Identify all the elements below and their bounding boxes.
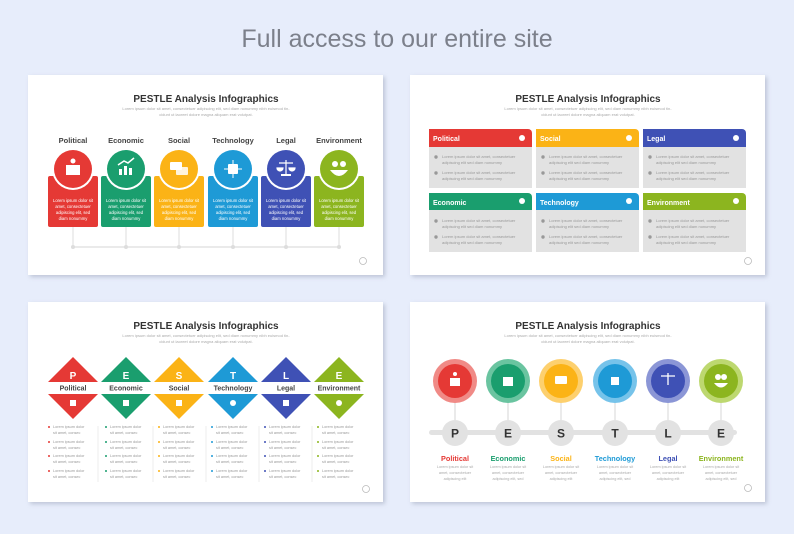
panel: slide 4 timeline: cidunt ut laoreet dolore magna aliquam erat volutpat. [541,339,635,344]
panel: slide 4 timeline: L [664,426,672,440]
icons slide 1 [66,158,348,178]
panel: slide 3 diamonds: Lorem ipsum dolor [322,469,354,473]
panel: slide 1 circles with boxes: adipiscing elit, sed [216,210,251,215]
panel: slide 4 timeline: adipiscing elit, sed [705,477,737,481]
panel: slide 2 grid cards: adipiscing elit sed diam nonummy [656,224,716,229]
panel: slide 3 diamonds: sit amet, consec [53,431,81,435]
panel: slide 2 grid cards: adipiscing elit sed diam nonummy [656,176,716,181]
panel: slide 4 timeline: Political [441,454,469,463]
panel: slide 4 timeline: PESTLE Analysis Infographics [515,321,661,332]
panel: slide 4 timeline: amet, consectetuer [545,471,578,475]
panel: slide 3 diamonds: T [230,371,236,382]
panel: slide 2 grid cards: Lorem ipsum dolor sit amet, consectetuer [656,154,730,159]
panel: slide 2 grid cards: Lorem ipsum dolor sit amet, consectetuer [442,218,516,223]
panel: slide 4 timeline: Environment [699,454,744,463]
panel: slide 3 diamonds: Social [169,386,189,392]
panel: slide 3 diamonds: E [336,371,343,382]
panel: slide 2 grid cards: Lorem ipsum dolor sit amet, consectetuer [656,234,730,239]
panel: slide 3 diamonds: Political [60,386,86,392]
panel: slide 3 diamonds: sit amet, consec [110,460,138,464]
panel: slide 2 grid cards: adipiscing elit sed diam nonummy [549,240,609,245]
panel: slide 3 diamonds: Lorem ipsum dolor [269,454,301,458]
panel: slide 3 diamonds: sit amet, consec [163,431,191,435]
panel: slide 4 timeline: Lorem ipsum dolor sit [543,465,580,469]
panel: slide 3 diamonds: sit amet, consec [269,475,297,479]
panel: slide 2 grid cards: Lorem ipsum dolor sit amet, consectetuer [442,234,516,239]
panel: slide 3 diamonds: Lorem ipsum dolor [269,425,301,429]
panel: slide 2 grid cards: adipiscing elit sed diam nonummy [442,176,502,181]
panel: slide 4 timeline: S [557,426,565,440]
panel: slide 2 grid cards: Lorem ipsum dolor sit amet, consectetuer [549,218,623,223]
panel: slide 1 circles with boxes: Legal [276,136,296,145]
panel: slide 3 diamonds: Lorem ipsum dolor [269,469,301,473]
panel: slide 4 timeline: adipiscing elit, sed [599,477,631,481]
panel: slide 3 diamonds: Lorem ipsum dolor [163,425,195,429]
panel: slide 4 timeline: amet, consectetuer [439,471,472,475]
panel: slide 2 grid cards: Lorem ipsum dolor sit amet, consectetuer [656,218,730,223]
panel: slide 1 circles with boxes: amet, consectetuer [55,204,91,209]
panel: slide 3 diamonds: sit amet, consec [110,446,138,450]
panel: slide 3 diamonds: Lorem ipsum dolor [163,440,195,444]
panel: slide 3 diamonds: sit amet, consec [110,475,138,479]
panel: slide 2 grid cards: Lorem ipsum dolor sit amet, consectetuer [656,170,730,175]
panel: slide 1 circles with boxes: adipiscing elit, sed [162,210,197,215]
panel: slide 3 diamonds: sit amet, consec [53,446,81,450]
panel: slide 4 timeline: E [717,426,725,440]
panel: slide 2 grid cards: Economic [433,200,467,207]
panel: slide 3 diamonds: Lorem ipsum dolor [53,440,85,444]
panel: slide 2 grid cards: Lorem ipsum dolor sit amet, consectetuer [549,170,623,175]
panel: slide 3 diamonds: Lorem ipsum dolor [53,454,85,458]
panel: slide 1 circles with boxes: Lorem ipsum dolor sit [266,198,307,203]
panel: slide 3 diamonds: sit amet, consec [269,446,297,450]
panel: slide 2 grid cards: Lorem ipsum dolor sit amet, consectetuer [549,154,623,159]
panel: slide 4 timeline: Lorem ipsum dolor sit [597,465,634,469]
panel: slide 2 grid cards: adipiscing elit sed diam nonummy [656,160,716,165]
slide 1 title: PESTLE Analysis Infographics [133,94,279,105]
panel: slide 3 diamonds: sit amet, consec [269,431,297,435]
panel: slide 3 diamonds: sit amet, consec [163,475,191,479]
panel: slide 2 grid cards: PESTLE Analysis Infographics [515,94,661,105]
panel: slide 3 diamonds: Lorem ipsum dolor [216,454,248,458]
panel: slide 1 circles with boxes: diam nonummy [165,216,194,221]
panel: slide 3 diamonds: sit amet, consec [322,431,350,435]
panel: slide 2 grid cards: adipiscing elit sed diam nonummy [549,176,609,181]
panel: slide 1 circles with boxes: Lorem ipsum dolor sit [159,198,200,203]
header title: Full access to our entire site [241,25,553,53]
panel: slide 3 diamonds: sit amet, consec [53,460,81,464]
panel: slide 4 timeline: Lorem ipsum dolor sit [650,465,687,469]
panel: slide 3 diamonds [28,302,383,502]
panel: slide 2 grid cards: adipiscing elit sed diam nonummy [549,224,609,229]
panel: slide 3 diamonds: Legal [277,386,295,392]
panel: slide 4 timeline: adipiscing elit, sed [492,477,524,481]
panel: slide 4 timeline [410,302,765,502]
panel: slide 1 circles with boxes: Lorem ipsum dolor sit amet, consectetuer adipiscing elit, sed diam nonummy nibh euismod tin- [122,106,290,111]
panel: slide 3 diamonds: sit amet, consec [163,460,191,464]
panel: slide 1 circles with boxes: diam nonummy [325,216,354,221]
panel: slide 1 circles with boxes: Lorem ipsum dolor sit [213,198,254,203]
panel: slide 2 grid cards: Social [540,136,561,143]
panel: slide 2 grid cards: cidunt ut laoreet dolore magna aliquam erat volutpat. [541,112,635,117]
panel: slide 2 grid cards: Political [433,136,460,143]
panel: slide 4 timeline: Lorem ipsum dolor sit amet, consectetuer adipiscing elit, sed diam nonummy nibh euismod tin- [504,333,672,338]
panel: slide 4 timeline: Social [550,454,572,463]
panel: slide 1 circles with boxes: Lorem ipsum dolor sit [106,198,147,203]
panel: slide 3 diamonds: Lorem ipsum dolor [163,454,195,458]
panel: slide 3 diamonds: Lorem ipsum dolor [53,425,85,429]
panel: slide 2 grid cards: Environment [647,200,690,207]
panel: slide 2 grid cards: Lorem ipsum dolor sit amet, consectetuer [549,234,623,239]
panel: slide 3 diamonds: Lorem ipsum dolor [110,469,142,473]
panel: slide 3 diamonds: Lorem ipsum dolor [110,454,142,458]
panel: slide 3 diamonds: E [123,371,130,382]
panel: slide 1 circles with boxes: amet, consectetuer [108,204,144,209]
panel: slide 3 diamonds: Economic [109,386,143,392]
panel: slide 1 circles with boxes: adipiscing elit, sed [322,210,357,215]
panel: slide 3 diamonds: sit amet, consec [216,460,244,464]
panel: slide 1 circles with boxes: Lorem ipsum dolor sit [319,198,360,203]
panel: slide 2 grid cards: Lorem ipsum dolor sit amet, consectetuer [442,170,516,175]
panel: slide 1 circles with boxes [28,75,383,275]
panel: slide 2 grid cards: Legal [647,136,665,143]
panel: slide 2 grid cards: adipiscing elit sed diam nonummy [549,160,609,165]
panel: slide 3 diamonds: sit amet, consec [216,446,244,450]
panel: slide 1 circles with boxes: Social [168,136,190,145]
panel: slide 2 grid cards: adipiscing elit sed diam nonummy [442,240,502,245]
panel: slide 4 timeline: adipiscing elit [444,477,467,481]
panel: slide 3 diamonds: Technology [214,386,252,392]
panel: slide 4 timeline: adipiscing elit [657,477,680,481]
panel: slide 1 circles with boxes: adipiscing elit, sed [109,210,144,215]
panel: slide 4 timeline: E [504,426,512,440]
panel: slide 3 diamonds: L [283,371,289,382]
panel: slide 1 circles with boxes: amet, consectetuer [321,204,357,209]
panel: slide 1 circles with boxes: diam nonummy [219,216,248,221]
panel: slide 3 diamonds: sit amet, consec [163,446,191,450]
panel: slide 3 diamonds: sit amet, consec [216,475,244,479]
panel: slide 1 circles with boxes: adipiscing elit, sed [56,210,91,215]
panel: slide 4 timeline: P [451,426,459,440]
panel: slide 4 timeline: Lorem ipsum dolor sit [437,465,474,469]
panel: slide 3 diamonds: Lorem ipsum dolor [110,440,142,444]
panel: slide 1 circles with boxes: diam nonummy [112,216,141,221]
panel: slide 3 diamonds: sit amet, consec [269,460,297,464]
panel: slide 3 diamonds: Lorem ipsum dolor [216,425,248,429]
panel: slide 2 grid cards: adipiscing elit sed diam nonummy [442,160,502,165]
panel: slide 2 grid cards [410,75,765,275]
panel: slide 3 diamonds: sit amet, consec [322,446,350,450]
panel: slide 1 circles with boxes: amet, consectetuer [161,204,197,209]
panel: slide 3 diamonds: Lorem ipsum dolor [322,454,354,458]
panel: slide 3 diamonds: cidunt ut laoreet dolore magna aliquam erat volutpat. [159,339,253,344]
panel: slide 4 timeline: amet, consectetuer [599,471,632,475]
panel: slide 4 timeline: amet, consectetuer [652,471,685,475]
panel: slide 4 timeline: adipiscing elit [550,477,573,481]
panel: slide 2 grid cards: Lorem ipsum dolor sit amet, consectetuer adipiscing elit, sed diam nonummy nibh euismod tin- [504,106,672,111]
panel: slide 3 diamonds: Lorem ipsum dolor [322,440,354,444]
panel: slide 1 circles with boxes: Environment [316,136,362,145]
panel: slide 3 diamonds: Lorem ipsum dolor sit amet, consectetuer adipiscing elit, sed diam nonummy nibh euismod tin- [122,333,290,338]
panel: slide 4 timeline: Lorem ipsum dolor sit [703,465,740,469]
panel: slide 4 timeline: Lorem ipsum dolor sit [490,465,527,469]
panel: slide 3 diamonds: Lorem ipsum dolor [53,469,85,473]
panel: slide 2 grid cards: Lorem ipsum dolor sit amet, consectetuer [442,154,516,159]
panel: slide 3 diamonds: P [70,371,77,382]
panel: slide 4 timeline: Economic [491,454,525,463]
panel: slide 1 circles with boxes: diam nonummy [272,216,301,221]
panel: slide 3 diamonds: Lorem ipsum dolor [322,425,354,429]
panel: slide 4 timeline: Legal [658,454,678,463]
panel: slide 3 diamonds: sit amet, consec [110,431,138,435]
panel: slide 3 diamonds: Lorem ipsum dolor [216,440,248,444]
panel: slide 1 circles with boxes: Economic [108,136,144,145]
panel: slide 3 diamonds: sit amet, consec [322,460,350,464]
panel: slide 3 diamonds: sit amet, consec [216,431,244,435]
panel: slide 1 circles with boxes: amet, consectetuer [215,204,251,209]
panel: slide 3 diamonds: PESTLE Analysis Infographics [133,321,279,332]
panel: slide 1 circles with boxes: cidunt ut laoreet dolore magna aliquam erat volutpat. [159,112,253,117]
panel: slide 1 circles with boxes: Political [59,136,87,145]
panel: slide 3 diamonds: S [176,371,183,382]
panel: slide 4 timeline: Technology [595,454,636,463]
panel: slide 1 circles with boxes: Lorem ipsum dolor sit [53,198,94,203]
panel: slide 2 grid cards: adipiscing elit sed diam nonummy [442,224,502,229]
panel: slide 3 diamonds: Lorem ipsum dolor [163,469,195,473]
panel: slide 1 circles with boxes: Technology [212,136,255,145]
panel: slide 3 diamonds: Lorem ipsum dolor [216,469,248,473]
panel: slide 2 grid cards: Technology [540,200,579,207]
panel: slide 2 grid cards: adipiscing elit sed diam nonummy [656,240,716,245]
panel: slide 3 diamonds: Lorem ipsum dolor [110,425,142,429]
panel: slide 1 circles with boxes: diam nonummy [59,216,88,221]
panel: slide 3 diamonds: Environment [318,386,361,392]
panel: slide 1 circles with boxes: adipiscing elit, sed [269,210,304,215]
panel: slide 3 diamonds: sit amet, consec [53,475,81,479]
panel: slide 3 diamonds: Lorem ipsum dolor [269,440,301,444]
panel: slide 3 diamonds: sit amet, consec [322,475,350,479]
panel: slide 4 timeline: amet, consectetuer [492,471,525,475]
panel: slide 4 timeline: amet, consectetuer [705,471,738,475]
panel: slide 1 circles with boxes: amet, consectetuer [268,204,304,209]
panel: slide 4 timeline: T [611,426,619,440]
